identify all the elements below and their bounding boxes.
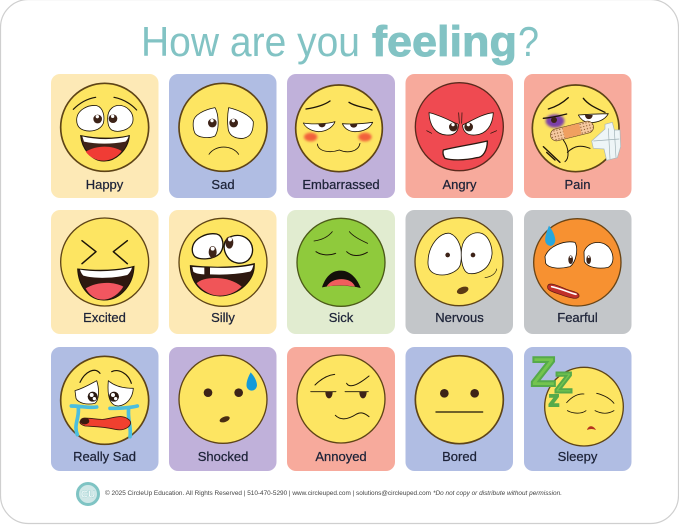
label: Happy (86, 177, 124, 192)
card: Bored (406, 347, 513, 471)
label: Really Sad (73, 449, 136, 464)
icon: sleepy face (531, 348, 623, 446)
card: Sleepy (524, 347, 632, 471)
icon: silly face (179, 218, 267, 306)
label: Nervous (435, 310, 484, 325)
card: Nervous (406, 210, 513, 334)
label: Annoyed (315, 449, 367, 464)
icon: sleepy face: Z (531, 348, 556, 395)
icon: bored face (415, 356, 503, 444)
label: Fearful (557, 310, 598, 325)
logo: CU (81, 490, 95, 500)
footer text: © 2025 CircleUp Education. All Rights Reserved | 510-470-5290 | www.circleuped.com | solutions@circleuped.com (105, 489, 431, 497)
label: Sad (211, 177, 235, 192)
title: feeling (372, 18, 517, 66)
icon: nervous face (415, 218, 503, 306)
card: Silly (169, 210, 276, 334)
icon: sad face (179, 83, 267, 171)
card: Sick (287, 210, 395, 334)
label: Bored (442, 449, 477, 464)
footer text: *Do not copy or distribute without permission. (433, 490, 562, 497)
icon: angry face (415, 83, 503, 171)
label: Sleepy (558, 449, 598, 464)
title: ? (518, 18, 539, 65)
title (141, 18, 539, 66)
card: Really Sad (51, 347, 158, 471)
card: Shocked (169, 347, 276, 471)
icon: shocked face (179, 355, 267, 443)
icon: excited face (61, 218, 149, 306)
icon: sleepy face: Z (549, 393, 559, 410)
footer text (105, 489, 562, 497)
icon: happy face (61, 83, 149, 171)
label: Pain (564, 177, 591, 192)
icon: really sad face (61, 356, 149, 444)
card: Happy (51, 74, 158, 198)
title: How are you (141, 18, 360, 65)
icon: sleepy face: Z (555, 368, 572, 400)
icon: embarrassed face (296, 85, 382, 172)
icon: sick face (297, 218, 385, 306)
icon: pain face (532, 85, 621, 172)
card: Pain (524, 74, 632, 198)
label: Angry (443, 177, 477, 192)
label: Silly (211, 310, 235, 325)
card: Annoyed (287, 347, 395, 471)
icon: fearful face (534, 219, 621, 306)
icon: annoyed face (297, 355, 385, 443)
card: Embarrassed (287, 74, 395, 198)
card: Excited (51, 210, 158, 334)
label: Shocked (198, 449, 248, 464)
card: Angry (406, 74, 513, 198)
logo (78, 484, 98, 504)
card: Sad (169, 74, 276, 198)
card: Fearful (524, 210, 632, 334)
label: Sick (329, 310, 354, 325)
label: Embarrassed (302, 177, 380, 192)
label: Excited (83, 310, 126, 325)
